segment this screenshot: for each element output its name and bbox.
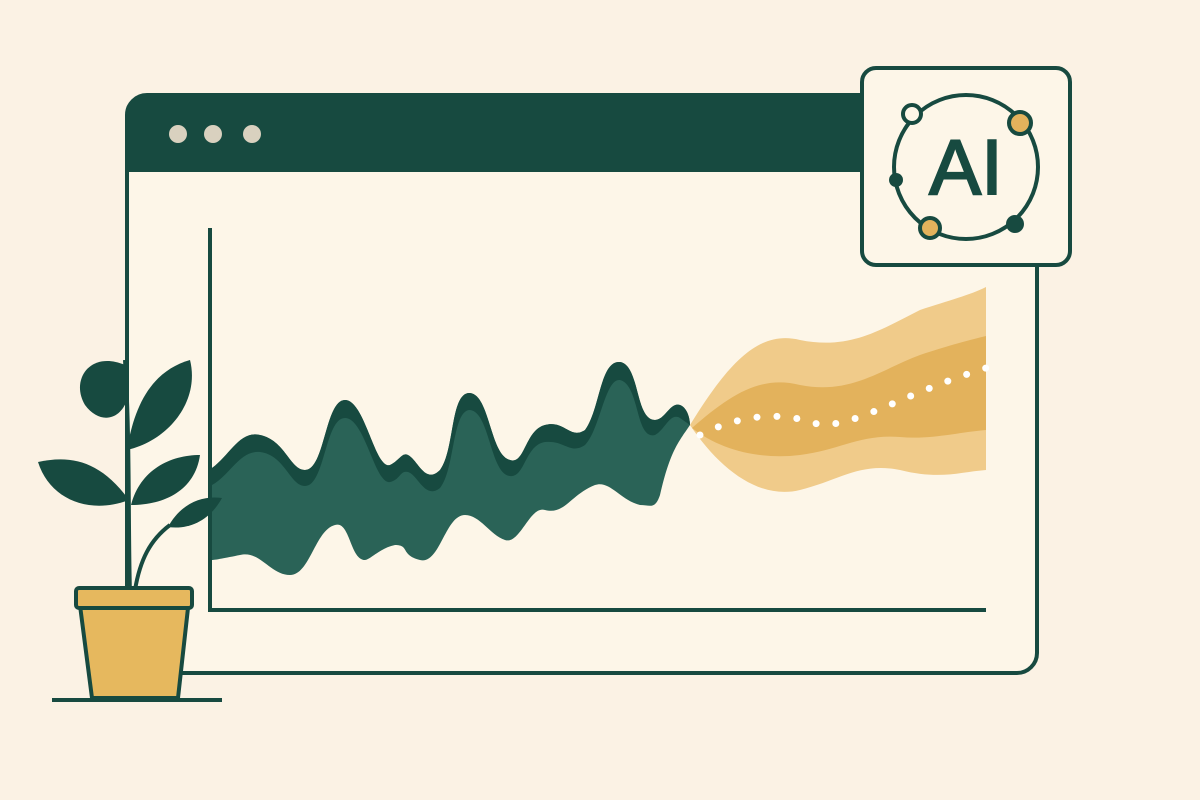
chart axes [209, 228, 986, 612]
browser window [127, 95, 1037, 673]
green historical wave [212, 362, 690, 575]
window header bar [127, 95, 1037, 172]
AI label: AI [929, 123, 1003, 211]
dotted trend line [700, 368, 986, 435]
AI badge [862, 68, 1070, 265]
gold forecast stream [690, 287, 986, 492]
potted plant [38, 360, 222, 700]
